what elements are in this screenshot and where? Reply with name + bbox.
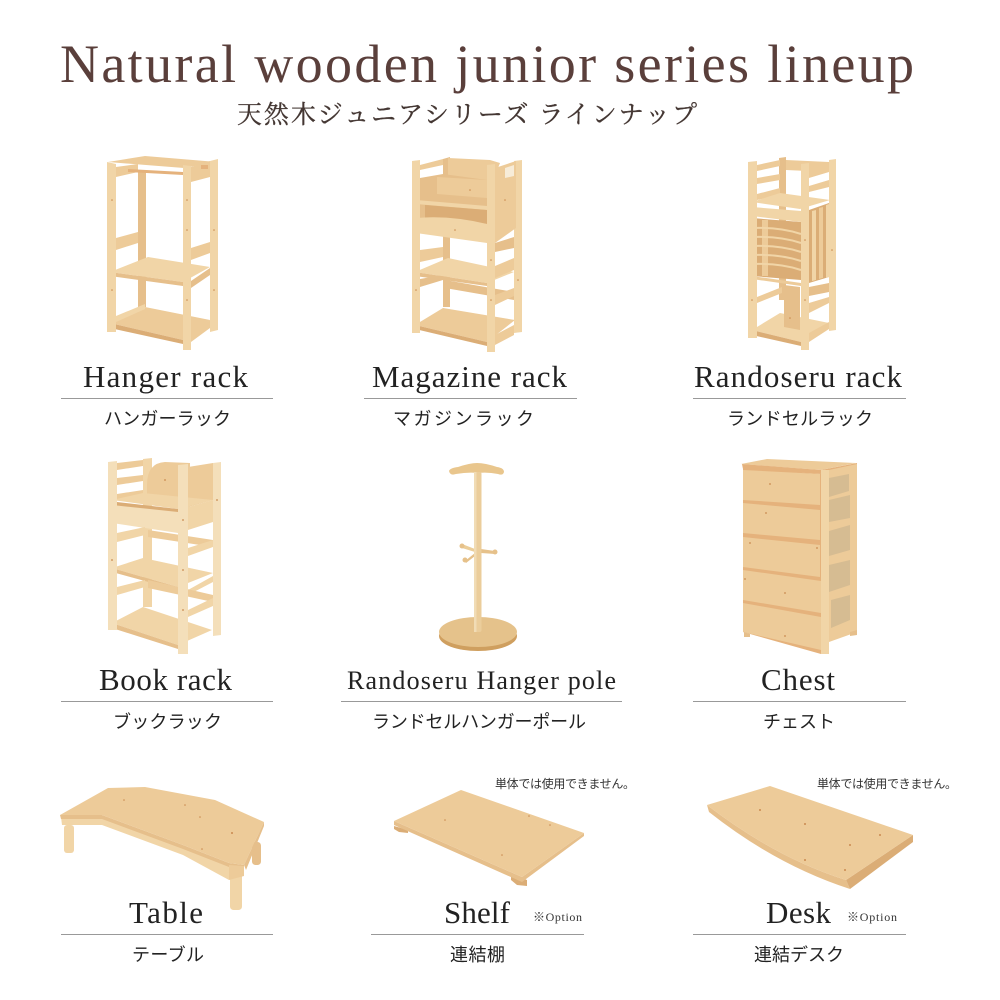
Japanese name: 連結棚: 連結棚 [450,945,505,965]
panel: shelf [371,776,635,965]
panel: book rack [61,458,273,732]
name: Randoseru Hanger pole: Randoseru Hanger pole [347,666,616,695]
Japanese name: マガジンラック: マガジンラック [393,409,534,429]
icon: desk board [707,786,913,889]
Japanese name: ブックラック: ブックラック [113,711,222,732]
Japanese name: ランドセルラック: ランドセルラック [727,409,873,429]
icon: book rack furniture [108,458,221,654]
panel: hanger rack [61,156,273,429]
panel: randoseru rack [693,157,906,429]
name: Shelf: Shelf [444,895,511,930]
icon: hanger rack furniture [107,156,218,350]
panel: magazine rack [364,157,577,429]
icon: hanger pole [439,463,517,651]
note: cannot be used alone: 単体では使用できません。 [495,776,635,791]
panel: desk [693,776,957,965]
icon: shelf board [394,790,584,886]
option note: ※Option [533,910,582,924]
Japanese name: テーブル: テーブル [132,944,204,965]
name: Table: Table [129,895,203,930]
subtitle: 天然木ジュニアシリーズ ラインナップ [237,101,697,129]
name: Desk: Desk [766,895,832,930]
option note: ※Option [847,910,897,924]
name: Hanger rack: Hanger rack [83,359,248,394]
icon: randoseru rack furniture [748,157,836,350]
Japanese name: チェスト: チェスト [763,712,835,732]
title: Natural wooden junior series lineup [60,34,914,94]
name: Chest: Chest [761,662,835,697]
icon: table furniture [60,787,264,910]
panel: randoseru hanger pole [341,463,622,732]
name: Magazine rack: Magazine rack [372,359,568,394]
Japanese name: ランドセルハンガーポール: ランドセルハンガーポール [372,712,586,732]
icon: magazine rack furniture [412,157,522,352]
name: Randoseru rack: Randoseru rack [694,359,902,394]
icon: chest furniture [741,459,857,654]
Japanese name: 連結デスク: 連結デスク [754,945,844,965]
note: cannot be used alone: 単体では使用できません。 [817,776,957,791]
name: Book rack: Book rack [99,662,232,697]
panel: table [60,787,273,965]
panel: chest [693,459,906,732]
Japanese name: ハンガーラック: ハンガーラック [104,409,231,429]
